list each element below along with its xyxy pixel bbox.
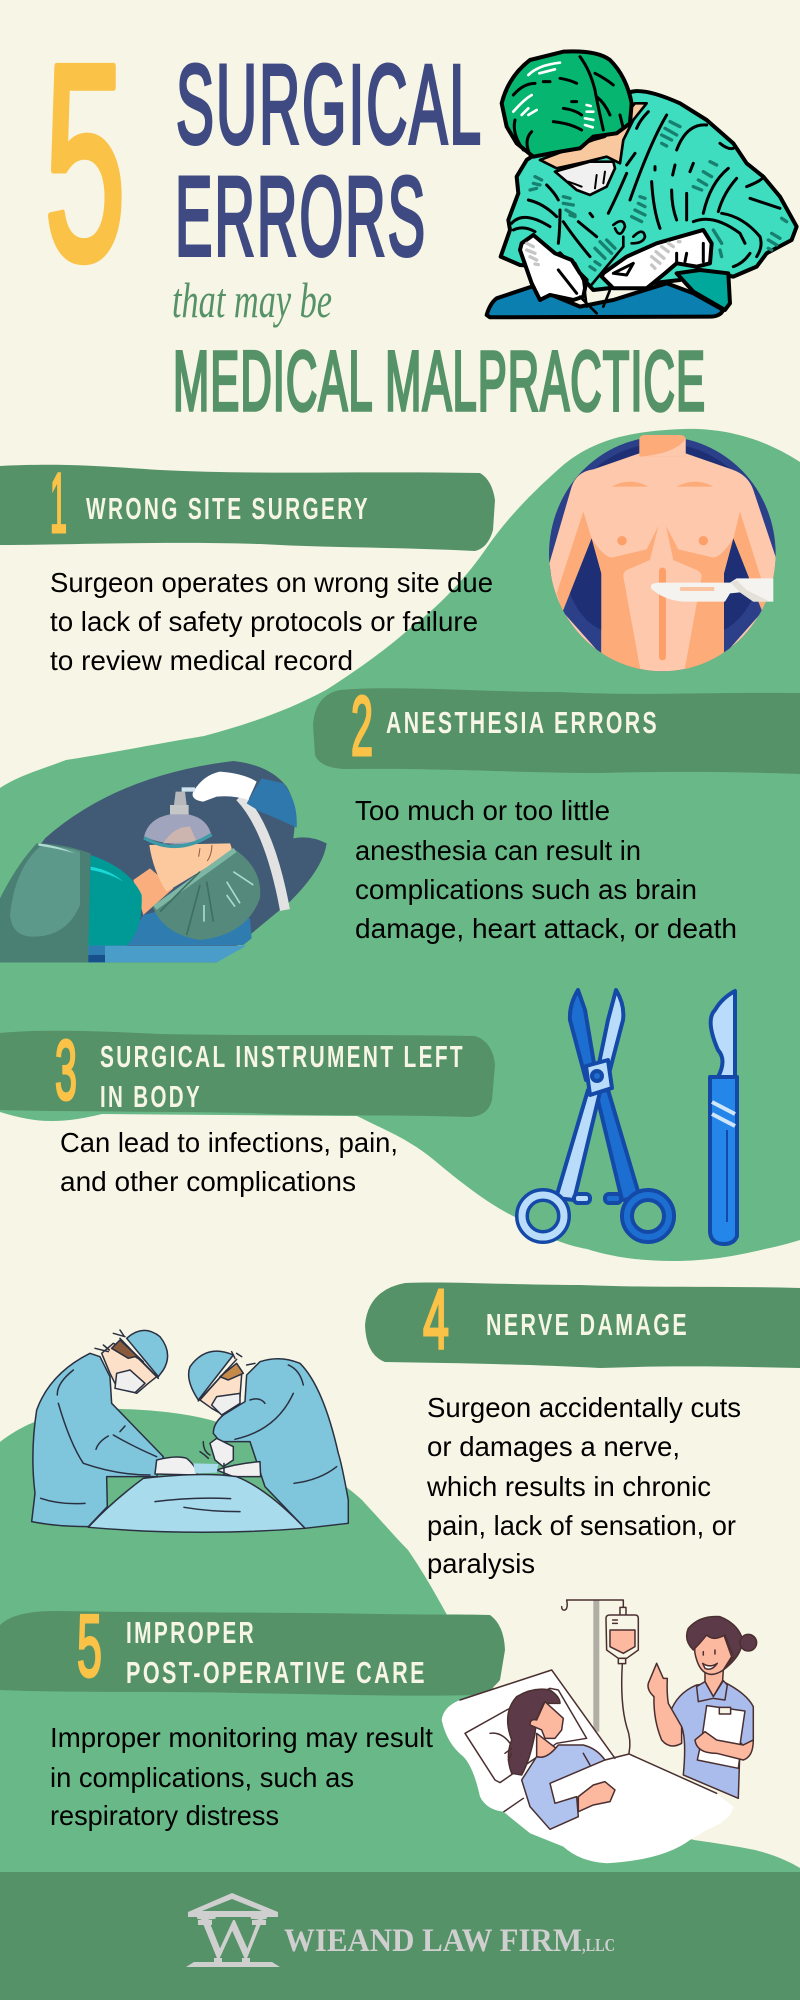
icon: nurse with patient in bed xyxy=(442,1600,757,1863)
body text 5: in complications, such as xyxy=(50,1762,354,1793)
heading: surgical: SURGICAL xyxy=(176,42,483,167)
body text 2: damage, heart attack, or death xyxy=(355,913,737,944)
section 1: 1 xyxy=(50,456,67,550)
section 3 xyxy=(0,1023,495,1197)
icon: two surgeons operating xyxy=(32,1330,348,1532)
body text 3 xyxy=(60,1127,398,1197)
banner 2 xyxy=(313,688,800,774)
number 4: 4 xyxy=(423,1272,449,1366)
green background wave: upper xyxy=(0,429,800,1261)
banner 3 xyxy=(0,1031,495,1117)
main title xyxy=(44,7,706,428)
section 2 xyxy=(313,679,800,944)
icon: surgeon in green scrubs xyxy=(487,51,797,317)
section 3: 3 xyxy=(55,1023,77,1117)
logo: Wieand Law Firm xyxy=(186,1893,615,1972)
section 5 xyxy=(0,1596,505,1831)
body text 1: to lack of safety protocols or failure xyxy=(50,606,478,637)
footer band xyxy=(0,1872,800,2000)
body text 2: Too much or too little xyxy=(355,795,610,826)
body text 4: Surgeon accidentally cuts xyxy=(427,1392,741,1423)
body text 1: to review medical record xyxy=(50,645,353,676)
body text 5: Improper monitoring may result xyxy=(50,1722,433,1753)
heading 2: ANESTHESIA ERRORS xyxy=(386,705,659,740)
icon: patient under anesthesia xyxy=(0,761,327,962)
heading 3 xyxy=(100,1039,465,1114)
body text 5 xyxy=(50,1722,433,1831)
body text 3: Can lead to infections, pain, xyxy=(60,1127,398,1158)
green background wave: lower xyxy=(0,1409,800,1880)
heading 5 xyxy=(126,1615,427,1690)
body text 2: anesthesia can result in xyxy=(355,835,641,866)
heading 1: WRONG SITE SURGERY xyxy=(86,491,370,526)
heading: errors: ERRORS xyxy=(175,154,427,279)
subheading: that may be: that may be xyxy=(172,272,332,328)
banner 5 xyxy=(0,1611,505,1696)
firm suffix: ,LLC xyxy=(582,1935,615,1955)
heading 3: SURGICAL INSTRUMENT LEFT xyxy=(100,1039,465,1074)
body text 4: which results in chronic xyxy=(426,1471,711,1502)
banner 1 xyxy=(0,465,495,551)
body text 4 xyxy=(426,1392,741,1579)
body text 1: Surgeon operates on wrong site due xyxy=(50,567,493,598)
big number 5: 5 xyxy=(44,7,126,319)
icon: scalpel xyxy=(710,991,737,1244)
banner 4 xyxy=(365,1282,800,1368)
body text 2 xyxy=(355,795,737,944)
body text 1 xyxy=(50,567,493,676)
number 5: 5 xyxy=(77,1596,102,1695)
body text 4: pain, lack of sensation, or xyxy=(427,1510,736,1541)
body text 2: complications such as brain xyxy=(355,874,697,905)
heading 3: IN BODY xyxy=(100,1079,202,1114)
heading 5: IMPROPER xyxy=(126,1615,256,1650)
firm name: WIEAND LAW FIRM xyxy=(284,1923,582,1959)
body text 4: paralysis xyxy=(427,1548,535,1579)
heading 5: POST-OPERATIVE CARE xyxy=(126,1655,427,1690)
section 4 xyxy=(365,1272,800,1579)
body text 5: respiratory distress xyxy=(50,1800,279,1831)
section 2: 2 xyxy=(351,679,373,773)
body text 4: or damages a nerve, xyxy=(427,1431,680,1462)
heading 4: NERVE DAMAGE xyxy=(486,1307,689,1342)
section 1 xyxy=(0,456,495,676)
icon: surgical scissors xyxy=(522,990,669,1237)
icon: bare torso with scalpel xyxy=(549,435,780,673)
icon: temple pediment logo xyxy=(186,1893,280,1972)
icon: temple pediment logo: W xyxy=(197,1904,268,1972)
body text 3: and other complications xyxy=(60,1166,356,1197)
